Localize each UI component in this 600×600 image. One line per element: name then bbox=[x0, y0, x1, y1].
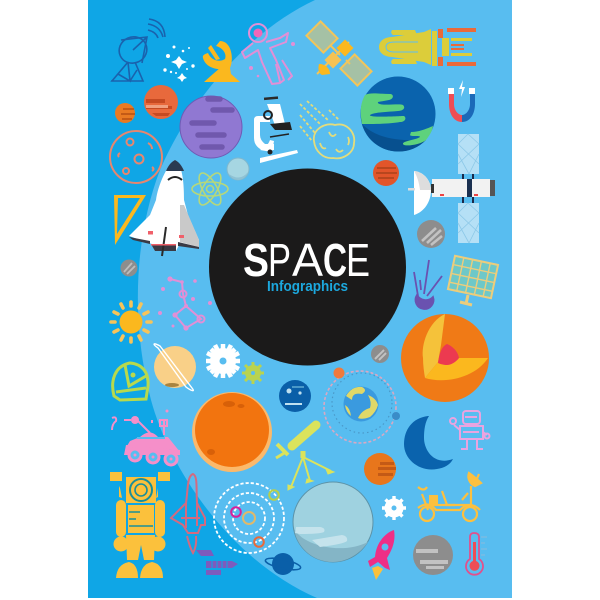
icon: small red orange planet bbox=[373, 160, 399, 186]
icon: pink sparkle dots bbox=[249, 42, 295, 77]
icon: small orange planet bbox=[115, 103, 135, 123]
icon: grey planet right bbox=[417, 220, 445, 248]
icon: thermometer bbox=[466, 533, 487, 575]
icon: blue crescent moon bbox=[404, 416, 453, 469]
icon: triangle ruler bbox=[114, 195, 146, 245]
icon: meteor bbox=[300, 101, 354, 158]
icon: white small gear bbox=[382, 496, 406, 520]
icon: microscope bbox=[254, 96, 298, 163]
title: P bbox=[268, 234, 291, 286]
icon: radio dish outline bbox=[111, 19, 165, 81]
title: C bbox=[323, 234, 347, 286]
icon: space shuttle bbox=[129, 160, 199, 256]
icon: big orange sun planet bbox=[192, 392, 272, 472]
subtitle: Infographics bbox=[267, 279, 348, 295]
icon: grey planet left bbox=[120, 260, 138, 276]
icon: satellite body bbox=[318, 40, 353, 75]
icon: orange planet top bbox=[144, 85, 178, 119]
icon: red and blue magnet bbox=[448, 80, 475, 122]
icon: purple rocket bbox=[196, 550, 238, 575]
icon: white stars bbox=[163, 46, 195, 82]
icon: pink rover bbox=[112, 410, 180, 465]
title: S bbox=[243, 234, 269, 286]
title bbox=[243, 234, 370, 286]
title: A bbox=[292, 234, 323, 286]
icon: pink shuttle outline bbox=[171, 474, 205, 553]
icon: yellow astronaut robot bbox=[110, 472, 170, 578]
icon: orbit diagram bbox=[324, 368, 400, 443]
title: E bbox=[346, 234, 370, 286]
icon: green observatory dome bbox=[113, 363, 148, 400]
icon: yellow rocket side view bbox=[379, 28, 476, 66]
panel: book cover background bbox=[88, 0, 512, 598]
icon: moon outline bbox=[110, 131, 162, 183]
icon: constellation bbox=[158, 276, 212, 331]
icon: solar panel bbox=[448, 256, 498, 305]
icon: pink helmet visor bbox=[254, 28, 262, 38]
icon: dashed solar system bbox=[214, 483, 284, 553]
icon: pink rocket bbox=[368, 530, 395, 580]
icon: telescope bbox=[276, 425, 334, 490]
panel: black title circle bbox=[209, 168, 406, 366]
icon: dark blue small planet bbox=[279, 380, 311, 412]
icon: sputnik bbox=[414, 260, 442, 309]
icon: small grey planet bbox=[371, 345, 389, 363]
icon: space station bbox=[408, 134, 495, 243]
icon: purple planet bbox=[180, 96, 242, 158]
icon: white gear bbox=[206, 344, 240, 378]
icon: dark blue saturn bbox=[264, 553, 302, 575]
icon: grey planet bottom bbox=[413, 535, 453, 575]
icon: orange planet bottom bbox=[364, 453, 396, 485]
icon: small glass planet bbox=[227, 158, 249, 180]
icon: big glass planet bbox=[293, 482, 373, 562]
icon: pink astronaut outline bbox=[242, 24, 292, 84]
icon: yellow ringed planet bbox=[154, 344, 196, 391]
icon: yellow satellite dish bbox=[203, 41, 240, 82]
icon: green gear bbox=[242, 362, 264, 384]
icon: yellow satellite bbox=[306, 21, 372, 86]
icon: yellow lunar rover bbox=[418, 473, 481, 521]
icon: blue green planet bbox=[360, 76, 436, 152]
icon: pink robot bbox=[450, 411, 490, 449]
icon: earth core cutaway bbox=[401, 314, 489, 402]
icon: atom bbox=[192, 170, 228, 208]
icon: sun bbox=[111, 302, 151, 342]
